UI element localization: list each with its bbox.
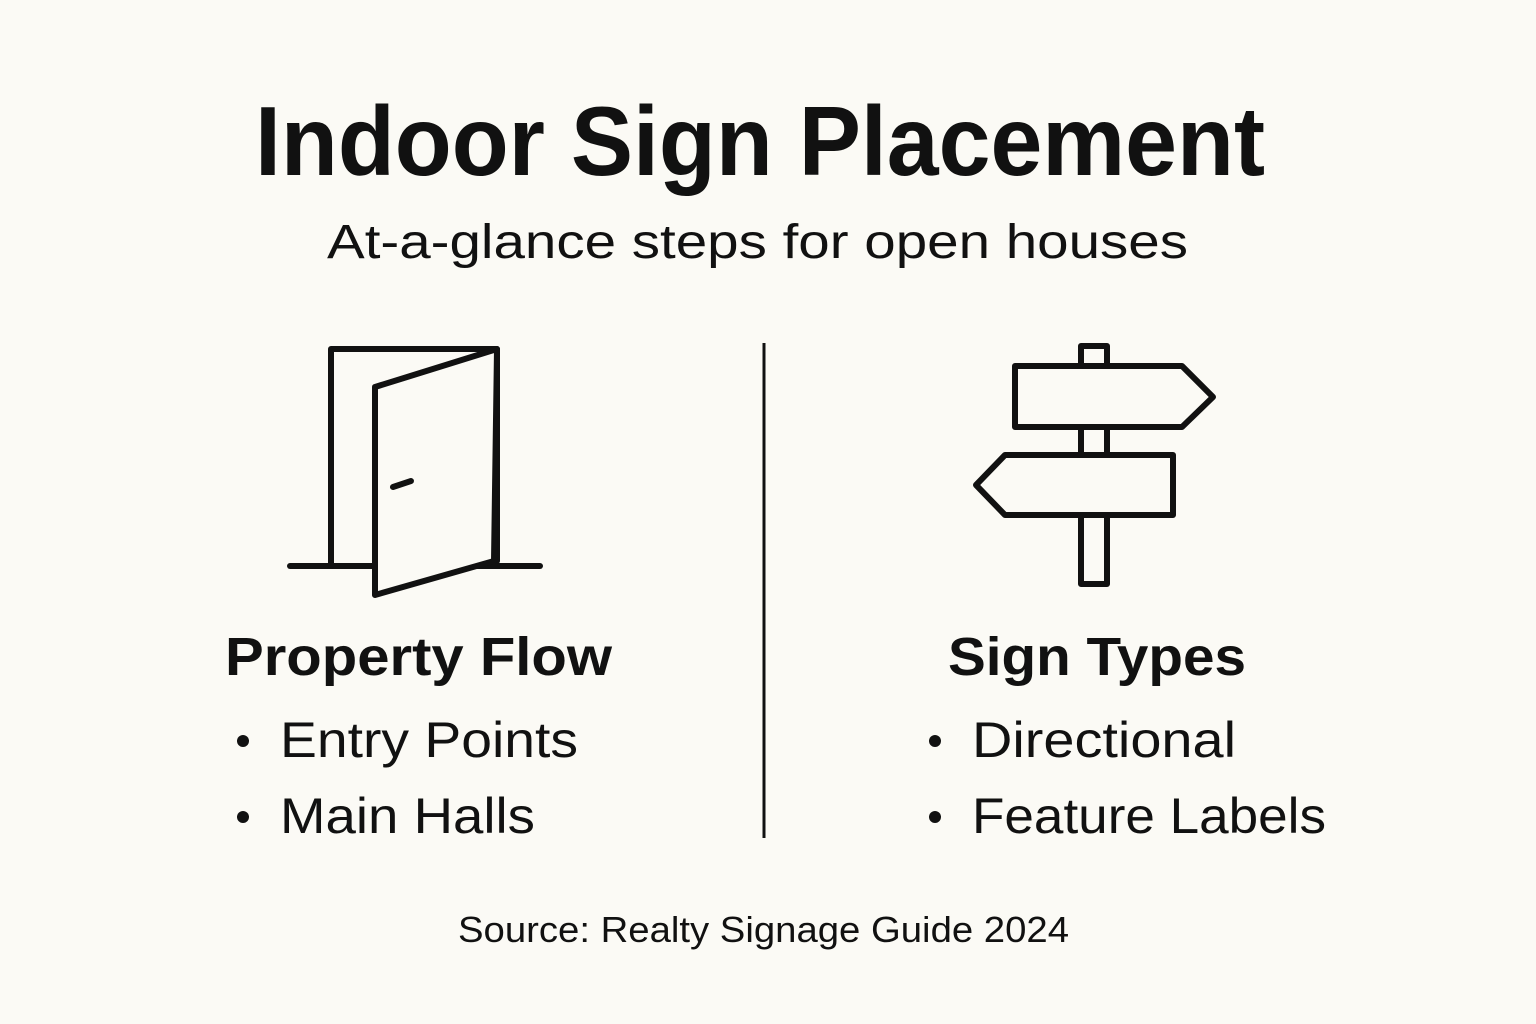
heading: sign types: Sign Types bbox=[948, 627, 1246, 687]
panel: sign types bbox=[929, 346, 1326, 844]
icon: open door bbox=[290, 349, 540, 595]
title: Indoor Sign Placement bbox=[255, 86, 1265, 196]
panel: property flow bbox=[225, 349, 613, 844]
list: property flow items bbox=[237, 712, 578, 844]
list: sign type items: Directional bbox=[972, 712, 1236, 768]
source note: Source: Realty Signage Guide 2024 bbox=[458, 909, 1069, 950]
list: sign type items: Feature Labels bbox=[972, 788, 1326, 844]
list: sign type items bbox=[929, 712, 1326, 844]
icon: signpost bbox=[976, 346, 1213, 584]
list: property flow items: Main Halls bbox=[280, 788, 535, 844]
subtitle: At-a-glance steps for open houses bbox=[327, 216, 1188, 269]
heading: property flow: Property Flow bbox=[225, 627, 613, 687]
list: property flow items: Entry Points bbox=[280, 712, 578, 768]
